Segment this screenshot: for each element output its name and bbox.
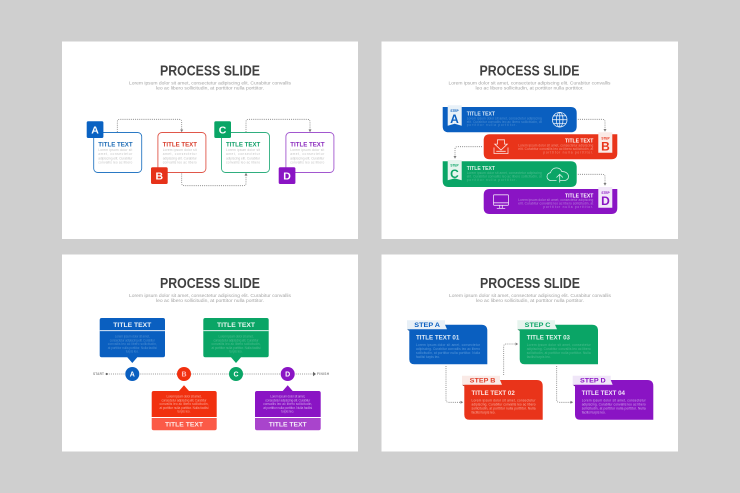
badge B: B: [156, 170, 164, 182]
card C: [222, 132, 270, 172]
card D: [575, 380, 653, 420]
bar C: [443, 161, 577, 187]
callout D: [255, 385, 321, 430]
step tag D: [573, 376, 613, 386]
callout C: Lorem ipsum dolor sit amet,: [218, 334, 254, 338]
card C: [520, 325, 598, 364]
step tag A: STEP: [450, 109, 460, 113]
card B: convallis leo ac libero: [163, 160, 197, 164]
callout A: convallis leo ac libero sollicitudin,: [108, 342, 157, 346]
node C: [229, 367, 243, 381]
bar D: elit. Curabitur convallis leo ac libero sollicitudin, at: [518, 202, 593, 206]
card C: TITLE TEXT 03: [527, 334, 570, 341]
connector arrows: [117, 119, 312, 186]
node B: [177, 367, 191, 381]
callout A: consectetur adipiscing elit. Curabitur: [110, 338, 156, 342]
card A: TITLE TEXT 01: [416, 334, 460, 341]
timeline: FINISH: [317, 372, 330, 376]
heading: PROCESS SLIDE: [480, 276, 580, 292]
bar A: [443, 107, 577, 132]
card C: convallis leo ac libero: [226, 160, 260, 164]
subtitle: [448, 80, 611, 91]
subtitle: [449, 293, 612, 303]
card B: TITLE TEXT 02: [472, 390, 515, 397]
subtitle: leo ac libero sollicitudin, at porttitor nulla porttitor.: [476, 298, 584, 303]
bar A: Lorem ipsum dolor sit amet, consectetur adipiscing: [467, 116, 542, 120]
subtitle: leo ac libero sollicitudin, at porttitor nulla porttitor.: [156, 86, 264, 91]
node C: C: [233, 372, 239, 378]
step tag D: STEP: [601, 191, 611, 195]
step tag A: STEP A: [414, 322, 441, 329]
card B: [464, 380, 543, 420]
callout A: Lorem ipsum dolor sit amet,: [115, 334, 150, 338]
step tag C: STEP C: [525, 322, 551, 329]
card A: facilisi turpis leo.: [416, 355, 440, 359]
card A: [94, 132, 142, 172]
panel: timeline process slide: [62, 254, 358, 452]
badge A: [87, 121, 103, 138]
heading: PROCESS SLIDE: [160, 63, 260, 79]
bar C: elit. Curabitur convallis leo ac libero sollicitudin, at: [467, 174, 542, 178]
bar A: elit. Curabitur convallis leo ac libero sollicitudin, at: [467, 120, 542, 124]
card D: TITLE TEXT: [290, 143, 325, 149]
badge B: [151, 167, 168, 184]
bar D: [484, 189, 617, 214]
heading: PROCESS SLIDE: [480, 63, 580, 79]
callout C: turpis leo.: [230, 350, 243, 354]
step tag B: [462, 376, 502, 386]
card C: sollicitudin, at porttitor nulla porttitor. Nulla: [527, 351, 591, 355]
callout D: convallis leo ac libero sollicitudin,: [263, 402, 312, 406]
callout C: convallis leo ac libero sollicitudin,: [212, 342, 261, 346]
bar D: porttitor nulla porttitor.: [543, 205, 593, 209]
card C: amet, consectetur: [226, 152, 261, 156]
callout C: TITLE TEXT: [217, 322, 256, 329]
panel: boxed process slide: [62, 42, 358, 239]
subtitle: leo ac libero sollicitudin, at porttitor nulla porttitor.: [476, 86, 584, 91]
card C: facilisi turpis leo.: [527, 355, 551, 359]
callout D: at porttitor nulla porttitor. Nulla facilisi: [263, 406, 312, 410]
card A: TITLE TEXT: [98, 143, 133, 149]
timeline: START: [93, 372, 104, 376]
step tag D: [598, 187, 612, 208]
step tag C: [517, 320, 557, 331]
step tag D: D: [601, 194, 610, 208]
step tag B: [598, 132, 612, 153]
card A: Lorem ipsum dolor sit: [98, 148, 132, 152]
callout B: at porttitor nulla porttitor. Nulla facilisi: [160, 406, 209, 410]
card A: adipiscing. Curabitur convallis leo ac libero: [416, 347, 480, 351]
callout C: at porttitor nulla porttitor. Nulla facilisi: [212, 346, 261, 350]
callout B: turpis leo.: [178, 410, 191, 414]
subtitle: [129, 80, 292, 91]
bar D: Lorem ipsum dolor sit amet, consectetur adipiscing: [518, 198, 594, 202]
step tag B: STEP: [601, 136, 611, 140]
card B: Lorem ipsum dolor sit amet, consectetur: [472, 399, 536, 403]
step tag B: B: [601, 139, 610, 153]
card D: facilisi turpis leo.: [582, 411, 606, 415]
card A: sollicitudin, at porttitor nulla porttitor. Nulla: [416, 351, 480, 355]
subtitle: Lorem ipsum dolor sit amet, consectetur adipiscing elit. Curabitur convallis: [448, 80, 611, 86]
callout B: Lorem ipsum dolor sit amet,: [166, 395, 202, 399]
node D: [281, 367, 295, 381]
bar A: porttitor nulla porttitor.: [467, 123, 517, 127]
card D: convallis leo ac libero: [290, 160, 325, 164]
callout B: [152, 385, 217, 430]
card A: [409, 325, 487, 364]
card D: adipiscing elit. Curabitur: [290, 156, 325, 160]
card D: TITLE TEXT 04: [582, 390, 625, 397]
bar B: [484, 134, 617, 159]
bar A: TITLE TEXT: [467, 111, 496, 117]
node A: A: [130, 372, 135, 378]
callout C: consectetur adipiscing elit. Curabitur: [214, 338, 259, 342]
card C: adipiscing elit. Curabitur: [226, 156, 261, 160]
connector arrows: [446, 342, 573, 404]
card D: amet, consectetur: [290, 152, 325, 156]
callout D: consectetur adipiscing elit. Curabitur: [265, 398, 311, 402]
badge D: D: [283, 170, 291, 182]
card C: adipiscing. Curabitur convallis leo ac libero: [527, 347, 591, 351]
node A: [125, 367, 139, 381]
heading: PROCESS SLIDE: [160, 276, 260, 292]
subtitle: Lorem ipsum dolor sit amet, consectetur adipiscing elit. Curabitur convallis: [129, 80, 292, 86]
step tag A: A: [450, 112, 459, 126]
badge D: [279, 167, 295, 184]
step tag C: C: [450, 167, 459, 181]
card D: adipiscing. Curabitur convallis leo ac libero: [582, 403, 646, 407]
card B: adipiscing. Curabitur convallis leo ac libero: [472, 403, 536, 407]
timeline: [93, 372, 330, 376]
step tag D: STEP D: [580, 377, 606, 384]
card B: Lorem ipsum dolor sit: [163, 148, 197, 152]
bar B: porttitor nulla porttitor.: [543, 150, 593, 154]
bar C: Lorem ipsum dolor sit amet, consectetur adipiscing: [467, 171, 542, 175]
bar C: TITLE TEXT: [467, 166, 496, 172]
node D: D: [285, 372, 290, 378]
step tag C: STEP: [450, 164, 460, 168]
card C: TITLE TEXT: [226, 143, 261, 149]
icon: monitor: [494, 195, 508, 208]
bar C: porttitor nulla porttitor.: [467, 178, 517, 182]
subtitle: [129, 293, 292, 303]
callout A: TITLE TEXT: [113, 322, 152, 329]
card B: facilisi turpis leo.: [472, 411, 496, 415]
icon: download: [494, 140, 508, 154]
step tag B: STEP B: [470, 377, 496, 384]
step tag A: [407, 320, 447, 331]
card C: Lorem ipsum dolor sit: [226, 148, 260, 152]
callout B: consectetur adipiscing elit. Curabitur: [162, 398, 207, 402]
badge A: A: [91, 124, 99, 136]
bar B: TITLE TEXT: [565, 139, 594, 145]
callout B: TITLE TEXT: [165, 422, 204, 429]
node B: B: [181, 372, 187, 378]
bar B: elit. Curabitur convallis leo ac libero sollicitudin, at: [518, 147, 593, 151]
card D: Lorem ipsum dolor sit amet, consectetur: [582, 399, 647, 403]
callout D: turpis leo.: [281, 410, 294, 414]
card B: [158, 132, 206, 172]
step tag C: [448, 160, 462, 181]
card D: sollicitudin, at porttitor nulla porttitor. Nulla: [582, 407, 646, 411]
bar B: Lorem ipsum dolor sit amet, consectetur adipiscing: [518, 144, 594, 148]
subtitle: leo ac libero sollicitudin, at porttitor nulla porttitor.: [156, 298, 264, 303]
card D: [286, 132, 334, 172]
card A: amet, consectetur: [98, 152, 133, 156]
callout C: [203, 318, 269, 363]
card A: Lorem ipsum dolor sit amet, consectetur: [416, 343, 481, 347]
card B: amet, consectetur: [163, 152, 198, 156]
card C: Lorem ipsum dolor sit amet, consectetur: [527, 343, 592, 347]
bar D: TITLE TEXT: [565, 193, 594, 199]
callout A: turpis leo.: [126, 350, 139, 354]
subtitle: Lorem ipsum dolor sit amet, consectetur adipiscing elit. Curabitur convallis: [129, 293, 292, 298]
badge C: C: [219, 124, 227, 136]
icon: cloud upload: [547, 168, 568, 182]
callout B: convallis leo ac libero sollicitudin,: [160, 402, 209, 406]
card B: TITLE TEXT: [163, 143, 197, 149]
card B: adipiscing elit. Curabitur: [163, 156, 198, 160]
step tag A: [448, 105, 462, 126]
panel: step cards process slide: [382, 254, 678, 452]
card A: adipiscing elit. Curabitur: [98, 156, 133, 160]
callout A: at porttitor nulla porttitor. Nulla facilisi: [108, 346, 157, 350]
callout D: TITLE TEXT: [269, 422, 308, 429]
card A: convallis leo ac libero: [98, 160, 133, 164]
badge C: [214, 121, 231, 138]
callout A: [100, 318, 165, 363]
panel: stacked bars process slide: [382, 42, 678, 239]
connector arrows: [454, 119, 606, 186]
card D: Lorem ipsum dolor sit: [290, 148, 324, 152]
card B: sollicitudin, at porttitor nulla porttitor. Nulla: [472, 407, 536, 411]
icon: globe: [552, 112, 567, 127]
callout D: Lorem ipsum dolor sit amet,: [270, 395, 305, 399]
subtitle: Lorem ipsum dolor sit amet, consectetur adipiscing elit. Curabitur convallis: [449, 293, 612, 298]
